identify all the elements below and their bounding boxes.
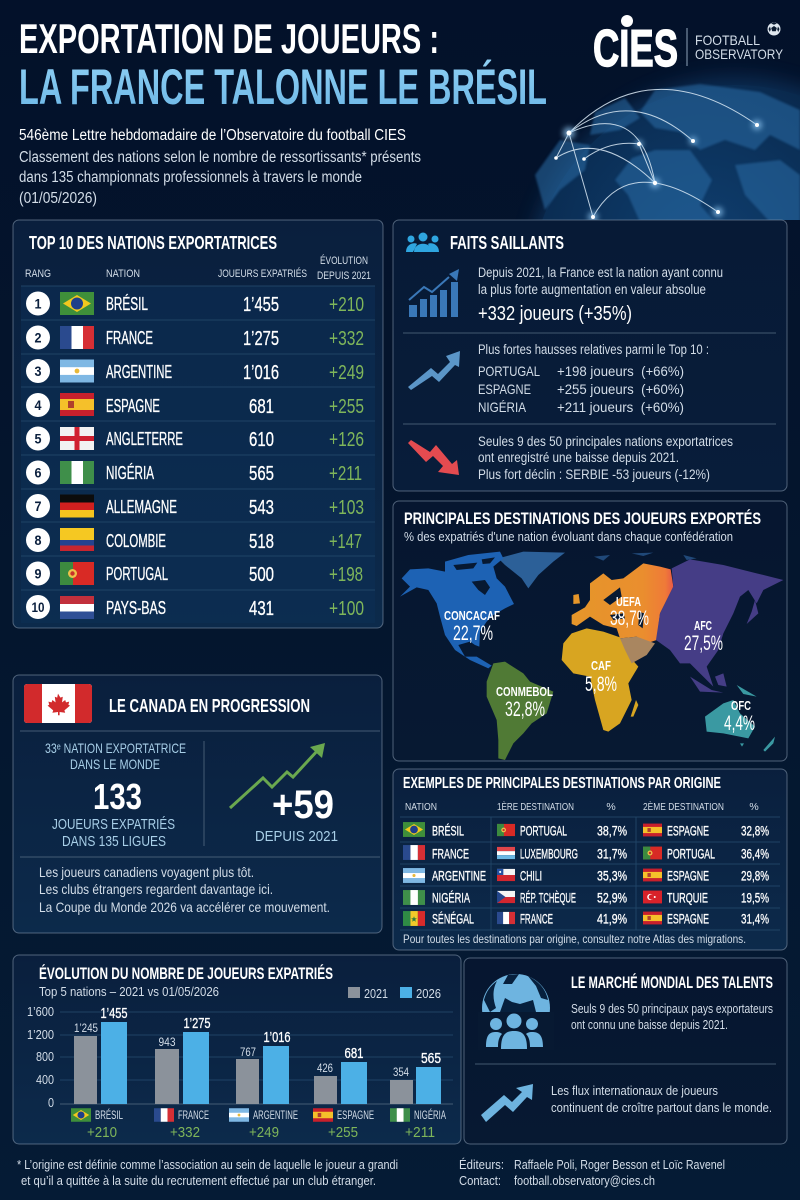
label: AFC: AFC [694,618,712,633]
label: CAF [585,658,617,696]
row 3 Argentine: 3 [34,363,42,379]
text: Canada commentary: La Coupe du Monde 2026 va accélérer ce mouvement. [39,899,330,915]
bars: Argentine [229,1030,298,1141]
icon: Canadian flag [24,684,92,723]
row 1 Brésil: 1 [34,296,42,312]
logo: CIES Football Observatory: OBSERVATORY [695,46,784,62]
label: UEFA [610,594,649,630]
row 6 Nigéria: 6 [34,464,42,480]
row 3 Argentine: ARGENTINE [106,362,172,382]
table header: % [606,801,616,813]
logo: CIES Football Observatory: FOOTBALL [695,32,760,48]
row 5 Angleterre: 5 [34,430,42,446]
row 3 Argentine: 1’016 [243,362,279,384]
fact: declines: ont enregistré une baisse depuis 2021. [478,450,679,465]
stat: 133 joueurs: DANS 135 LIGUES [62,833,166,850]
row 6 Nigéria: 565 [249,463,274,485]
row 8 Colombie: 8 [34,532,42,548]
region: Arabia [620,637,655,663]
icon: green rising arrow [230,743,325,808]
stat: +59: DEPUIS 2021 [255,828,338,845]
row France: 36,4% [741,846,769,862]
table header: 1ÈRE DESTINATION [497,800,574,813]
subtitle: 546ème Lettre hebdomadaire de l’Observatoire du football CIES [19,127,406,144]
label: CONMEBOL: 32,8% [505,698,545,721]
text: flux: continuent de croître partout dans le monde. [551,1100,772,1115]
row Brésil: BRÉSIL [432,824,464,838]
icon: rising arrow [481,1084,533,1122]
fact: relative increases: +198 joueurs (+66%) [557,363,684,379]
row Brésil: 38,7% [597,824,627,838]
stat: 133 joueurs: JOUEURS EXPATRIÉS [52,816,175,833]
bars: France: FRANCE [178,1110,209,1122]
bars: Nigéria: 565 [421,1051,441,1067]
table header: JOUEURS EXPATRIÉS [218,267,307,280]
label: OFC: OFC [731,698,751,713]
text: Canada commentary: Les joueurs canadiens voyagent plus tôt. [39,864,254,880]
bars: Brésil: +210 [87,1124,117,1141]
fact: relative increases [478,342,709,415]
fact: France absolute increase: Depuis 2021, la France est la nation ayant connu [478,265,723,280]
row 4 Espagne: 681 [249,396,274,418]
row France [403,845,769,862]
bars: Brésil [71,1006,128,1141]
fact: relative increases: NIGÉRIA [478,399,527,415]
bars: Espagne: ESPAGNE [337,1110,374,1122]
table header [405,800,759,813]
bars: France [154,1016,210,1141]
row 2 France [26,326,364,350]
region: UEFA [572,563,673,643]
fact: relative increases: +255 joueurs (+60%) [557,381,684,397]
bars: Argentine: 767 [240,1045,256,1059]
row 4 Espagne: 4 [34,397,42,413]
row Nigéria: 19,5% [741,890,769,906]
row France: 31,7% [597,846,627,862]
row Sénégal [403,911,769,926]
axis labels: 1’600 [27,1004,54,1019]
row Argentine: ARGENTINE [432,868,486,884]
row 7 Allemagne: 543 [249,497,274,519]
subtitle: Classement des nations selon le nombre de ressortissants* présents [19,149,421,166]
row Nigéria: TURQUIE [667,890,708,906]
panel: principales destinations map [393,501,787,761]
table header: NATION [106,268,140,280]
row Sénégal: SÉNÉGAL [432,912,474,926]
row 6 Nigéria: NIGÉRIA [106,463,154,483]
bars: Brésil: BRÉSIL [95,1109,123,1122]
row Brésil: 32,8% [741,824,769,838]
row 3 Argentine: +249 [329,362,364,384]
legend [348,986,441,1001]
bars: Argentine: +249 [249,1124,279,1141]
panel: marché mondial [464,958,787,1144]
stat: 133 joueurs: DANS LE MONDE [70,756,160,772]
row Argentine: ESPAGNE [667,868,709,884]
row 7 Allemagne: ALLEMAGNE [106,497,177,517]
row 7 Allemagne: 7 [34,498,42,514]
table header: 2ÈME DESTINATION [643,800,724,813]
axis labels: 1’200 [27,1027,54,1042]
row 3 Argentine [26,359,364,384]
text: baisse [571,1001,773,1032]
text: flux: Les flux internationaux de joueurs [551,1083,718,1098]
row Brésil: PORTUGAL [520,824,567,838]
row France: FRANCE [432,846,469,862]
region: AFC [656,559,783,687]
bars: Espagne [313,1046,374,1141]
row 9 Portugal: PORTUGAL [106,564,168,584]
subtitle: (01/05/2026) [19,190,97,207]
row 2 France: 2 [34,330,42,346]
table header: RANG [25,268,51,280]
decoration: globe with connection arcs [530,70,800,220]
icon: falling arrow [408,440,459,475]
row 2 France: FRANCE [106,328,153,348]
row 5 Angleterre: 610 [249,429,274,451]
credits: football.observatory@cies.ch [514,1173,655,1188]
label: UEFA: UEFA [616,594,641,609]
row 1 Brésil: +210 [329,294,364,316]
footnote: et qu’il a quittée à la suite du recrutement effectué par un club étranger. [21,1173,376,1188]
bars: Nigéria: 354 [393,1065,409,1079]
title: EXPORTATION DE JOUEURS : [19,15,439,62]
footnote: * L’origine est définie comme l’association au sein de laquelle le joueur a grandi [17,1157,398,1172]
row 9 Portugal [26,562,363,586]
subtitle: dans 135 championnats professionnels à travers le monde [19,169,362,186]
label: CAF: CAF [591,658,611,673]
bars: Argentine: ARGENTINE [253,1110,298,1122]
bars: Argentine: 1’016 [264,1030,290,1046]
label: OFC: 4,4% [724,712,755,735]
credits [459,1157,725,1188]
row 6 Nigéria: +211 [329,463,362,485]
table header: NATION [405,801,437,813]
fact: declines: Seules 9 des 50 principales nations exportatrices [478,434,733,449]
row 7 Allemagne: +103 [329,497,364,519]
row 2 France: +332 [329,328,364,350]
axis labels: 800 [36,1049,54,1064]
row 8 Colombie [26,528,362,553]
label: OFC [724,698,755,735]
label: UEFA: 38,7% [610,607,649,630]
row Sénégal: 41,9% [597,912,627,926]
fact: France absolute increase: la plus forte augmentation en valeur absolue [478,282,706,297]
axis labels [27,1004,54,1110]
bars: Nigéria: NIGÉRIA [414,1109,446,1122]
row 9 Portugal: 9 [34,566,42,582]
icon: people [406,232,439,252]
stat: +59 [255,783,338,845]
row 8 Colombie: +147 [329,531,362,553]
panel: faits saillants [393,220,787,491]
logo: CIES Football Observatory [593,15,784,78]
row Nigéria: RÉP. TCHÈQUE [520,890,576,906]
bars: Espagne: 426 [317,1061,333,1075]
row 10 Pays-Bas: 431 [249,598,274,620]
row 9 Portugal: +198 [329,564,363,586]
label: CONCACAF [444,608,500,645]
row 8 Colombie: 518 [249,531,274,553]
credits: Contact: [459,1173,501,1188]
bars: Nigéria: +211 [405,1124,435,1141]
label: CAF: 5,8% [585,673,617,696]
row 5 Angleterre [26,426,364,451]
text: Canada commentary: Les clubs étrangers regardent davantage ici. [39,881,273,897]
text: flux [551,1083,772,1115]
logo: CIES Football Observatory: CIES [593,20,678,78]
row 2 France: 1’275 [243,328,279,350]
row 9 Portugal: 500 [249,564,274,586]
fact: relative increases: +211 joueurs (+60%) [557,399,684,415]
row 8 Colombie: COLOMBIE [106,531,166,551]
row Argentine: CHILI [520,868,542,884]
region: OFC [705,700,755,738]
heading: Canada: LE CANADA EN PROGRESSION [109,696,310,716]
table header: % [749,801,759,813]
table header: ÉVOLUTION [320,254,368,267]
decoration: arctic islands [594,553,697,561]
row 1 Brésil: BRÉSIL [106,294,148,314]
heading: faits saillants: FAITS SAILLANTS [450,233,564,253]
bars: Brésil: 1’245 [74,1021,98,1035]
fact: declines [478,434,733,482]
row 6 Nigéria [26,460,362,485]
credits: Éditeurs: [459,1157,504,1172]
row France: LUXEMBOURG [520,846,578,862]
row 4 Espagne: +255 [329,396,364,418]
fact: relative increases: Plus fortes hausses relatives parmi le Top 10 : [478,342,709,357]
stat: +59: +59 [272,783,334,827]
row Argentine: 29,8% [741,868,769,884]
row Brésil [403,822,769,838]
row 10 Pays-Bas: 10 [32,599,45,615]
label: AFC [684,618,723,655]
world map [400,552,783,760]
bars: Espagne: 681 [344,1046,364,1062]
row Nigéria [403,890,769,906]
row 1 Brésil [26,292,364,316]
title [19,15,547,115]
icon: globe with people [478,974,554,1050]
panel: top 10 nations [13,220,383,628]
bars: France: 943 [158,1035,176,1049]
region: Greenland [498,552,565,588]
stat: 133 joueurs [45,740,186,850]
label: CONMEBOL [496,684,553,721]
axis labels: 0 [48,1095,54,1110]
label: CONCACAF: 22,7% [453,622,493,645]
icon: rising bar chart [409,269,459,317]
subheading: évolution: Top 5 nations – 2021 vs 01/05/2026 [39,984,219,999]
row 10 Pays-Bas [26,595,364,620]
row Sénégal: ESPAGNE [667,912,709,926]
row 5 Angleterre: ANGLETERRE [106,429,183,449]
row 10 Pays-Bas: +100 [329,598,364,620]
panel: évolution bar chart [13,955,461,1144]
table header [25,254,371,282]
row Brésil: ESPAGNE [667,824,709,838]
legend: 2026 [416,986,441,1001]
fact: relative increases: PORTUGAL [478,363,540,379]
row 7 Allemagne [26,494,364,519]
row 10 Pays-Bas: PAYS-BAS [106,598,166,618]
stat: 133 joueurs: 33ᵉ NATION EXPORTATRICE [45,740,186,756]
region: CONMEBOL [487,662,553,760]
heading: évolution: ÉVOLUTION DU NOMBRE DE JOUEURS EXPATRIÉS [39,964,333,983]
fact: France absolute increase: +332 joueurs (+35%) [478,303,632,325]
label: CONCACAF: CONCACAF [444,608,500,623]
stat: 133 joueurs: 133 [93,776,142,817]
text: baisse: ont connu une baisse depuis 2021. [571,1017,728,1032]
row Nigéria: NIGÉRIA [432,890,470,906]
icon: rising arrow [408,351,460,390]
region: CONCACAF [400,552,514,668]
text: Canada commentary [39,864,330,915]
bars: Espagne: +255 [328,1124,358,1141]
bars: Brésil: 1’455 [100,1006,128,1022]
axis labels: 400 [36,1072,54,1087]
subtitle [19,127,421,207]
region: CAF [562,628,638,732]
legend: 2021 [364,986,388,1001]
heading: top 10: TOP 10 DES NATIONS EXPORTATRICES [29,233,277,253]
footnote [17,1157,398,1188]
row Sénégal: FRANCE [520,912,553,926]
table header: DEPUIS 2021 [317,270,371,282]
bars: France: +332 [170,1124,200,1141]
row Argentine [403,868,769,884]
subheading: destinations: % des expatriés d'une nation évoluant dans chaque confédération [404,529,733,544]
label: AFC: 27,5% [684,632,723,655]
row 4 Espagne [26,393,364,418]
credits: Raffaele Poli, Roger Besson et Loïc Ravenel [514,1157,725,1172]
fact: declines: Plus fort déclin : SERBIE -53 joueurs (-12%) [478,467,710,482]
bars: France: 1’275 [184,1016,210,1032]
panel: Canada [13,675,382,933]
fact: France absolute increase [478,265,723,325]
panel: exemples de destinations [393,769,787,950]
row 1 Brésil: 1’455 [243,294,279,316]
row Argentine: 35,3% [597,868,627,884]
row France: PORTUGAL [667,846,715,862]
row Sénégal: 31,4% [741,912,769,926]
row 4 Espagne: ESPAGNE [106,396,160,416]
bars: Nigéria [390,1051,446,1141]
fact: relative increases: ESPAGNE [478,381,531,397]
row Nigéria: 52,9% [597,890,627,906]
label: CONMEBOL: CONMEBOL [496,684,553,699]
row 5 Angleterre: +126 [329,429,364,451]
